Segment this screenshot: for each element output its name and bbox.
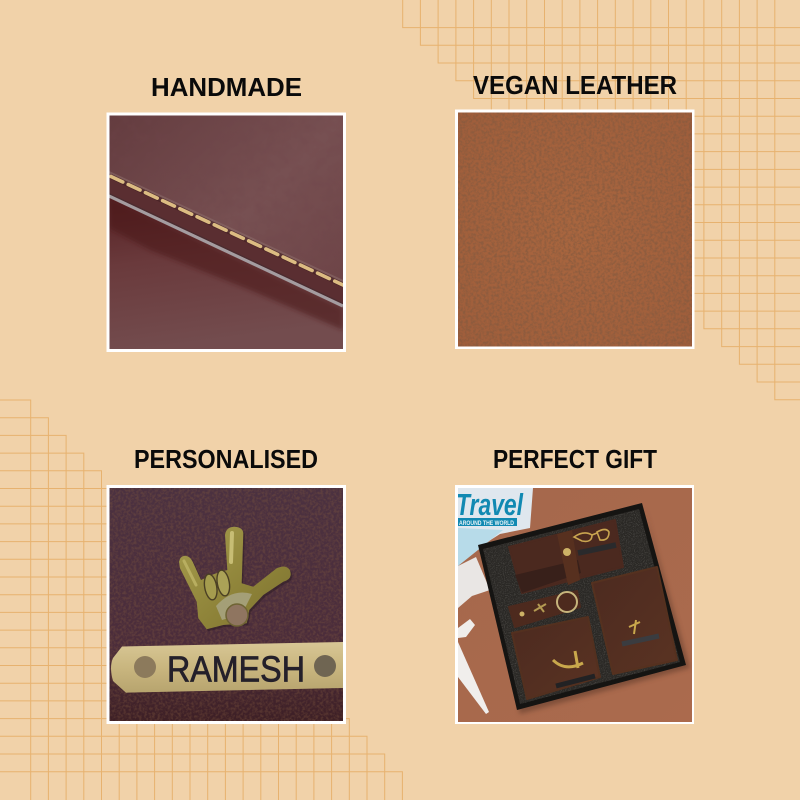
travel brochure — [456, 487, 533, 566]
black box — [478, 503, 686, 710]
wallet — [512, 617, 600, 699]
panel: perfect gift box photo — [455, 485, 694, 724]
box shadow — [517, 532, 691, 715]
leather surfaces and seam — [109, 116, 343, 349]
grid pattern: top right staircase — [403, 0, 800, 400]
photo frame — [106, 112, 346, 352]
nameplate: RAMESH — [167, 648, 305, 690]
panel: personalised charm and nameplate photo — [106, 485, 346, 724]
travel brochure: AROUND THE WORLD — [459, 520, 514, 527]
heading: vegan leather: VEGAN LEATHER — [473, 72, 677, 100]
gift box scene — [456, 487, 692, 722]
toy airplane — [458, 557, 490, 714]
leather, charm and nameplate — [110, 488, 343, 721]
photo frame — [455, 110, 694, 349]
nameplate — [111, 642, 343, 693]
heading: personalised: PERSONALISED — [134, 446, 318, 474]
panel: vegan leather texture photo — [455, 110, 694, 349]
travel brochure: Travel — [456, 487, 524, 522]
leather grain — [458, 112, 692, 346]
key chain — [509, 591, 580, 627]
icon: gold hand charm — [179, 527, 292, 631]
panel: handmade stitching photo — [106, 112, 346, 352]
heading: perfect gift: PERFECT GIFT — [493, 446, 657, 474]
photo frame — [106, 485, 346, 724]
photo frame — [455, 485, 694, 724]
glasses case — [509, 520, 623, 593]
grid pattern: bottom left staircase — [0, 400, 402, 800]
passport holder — [592, 567, 677, 674]
heading: handmade: HANDMADE — [151, 74, 302, 102]
